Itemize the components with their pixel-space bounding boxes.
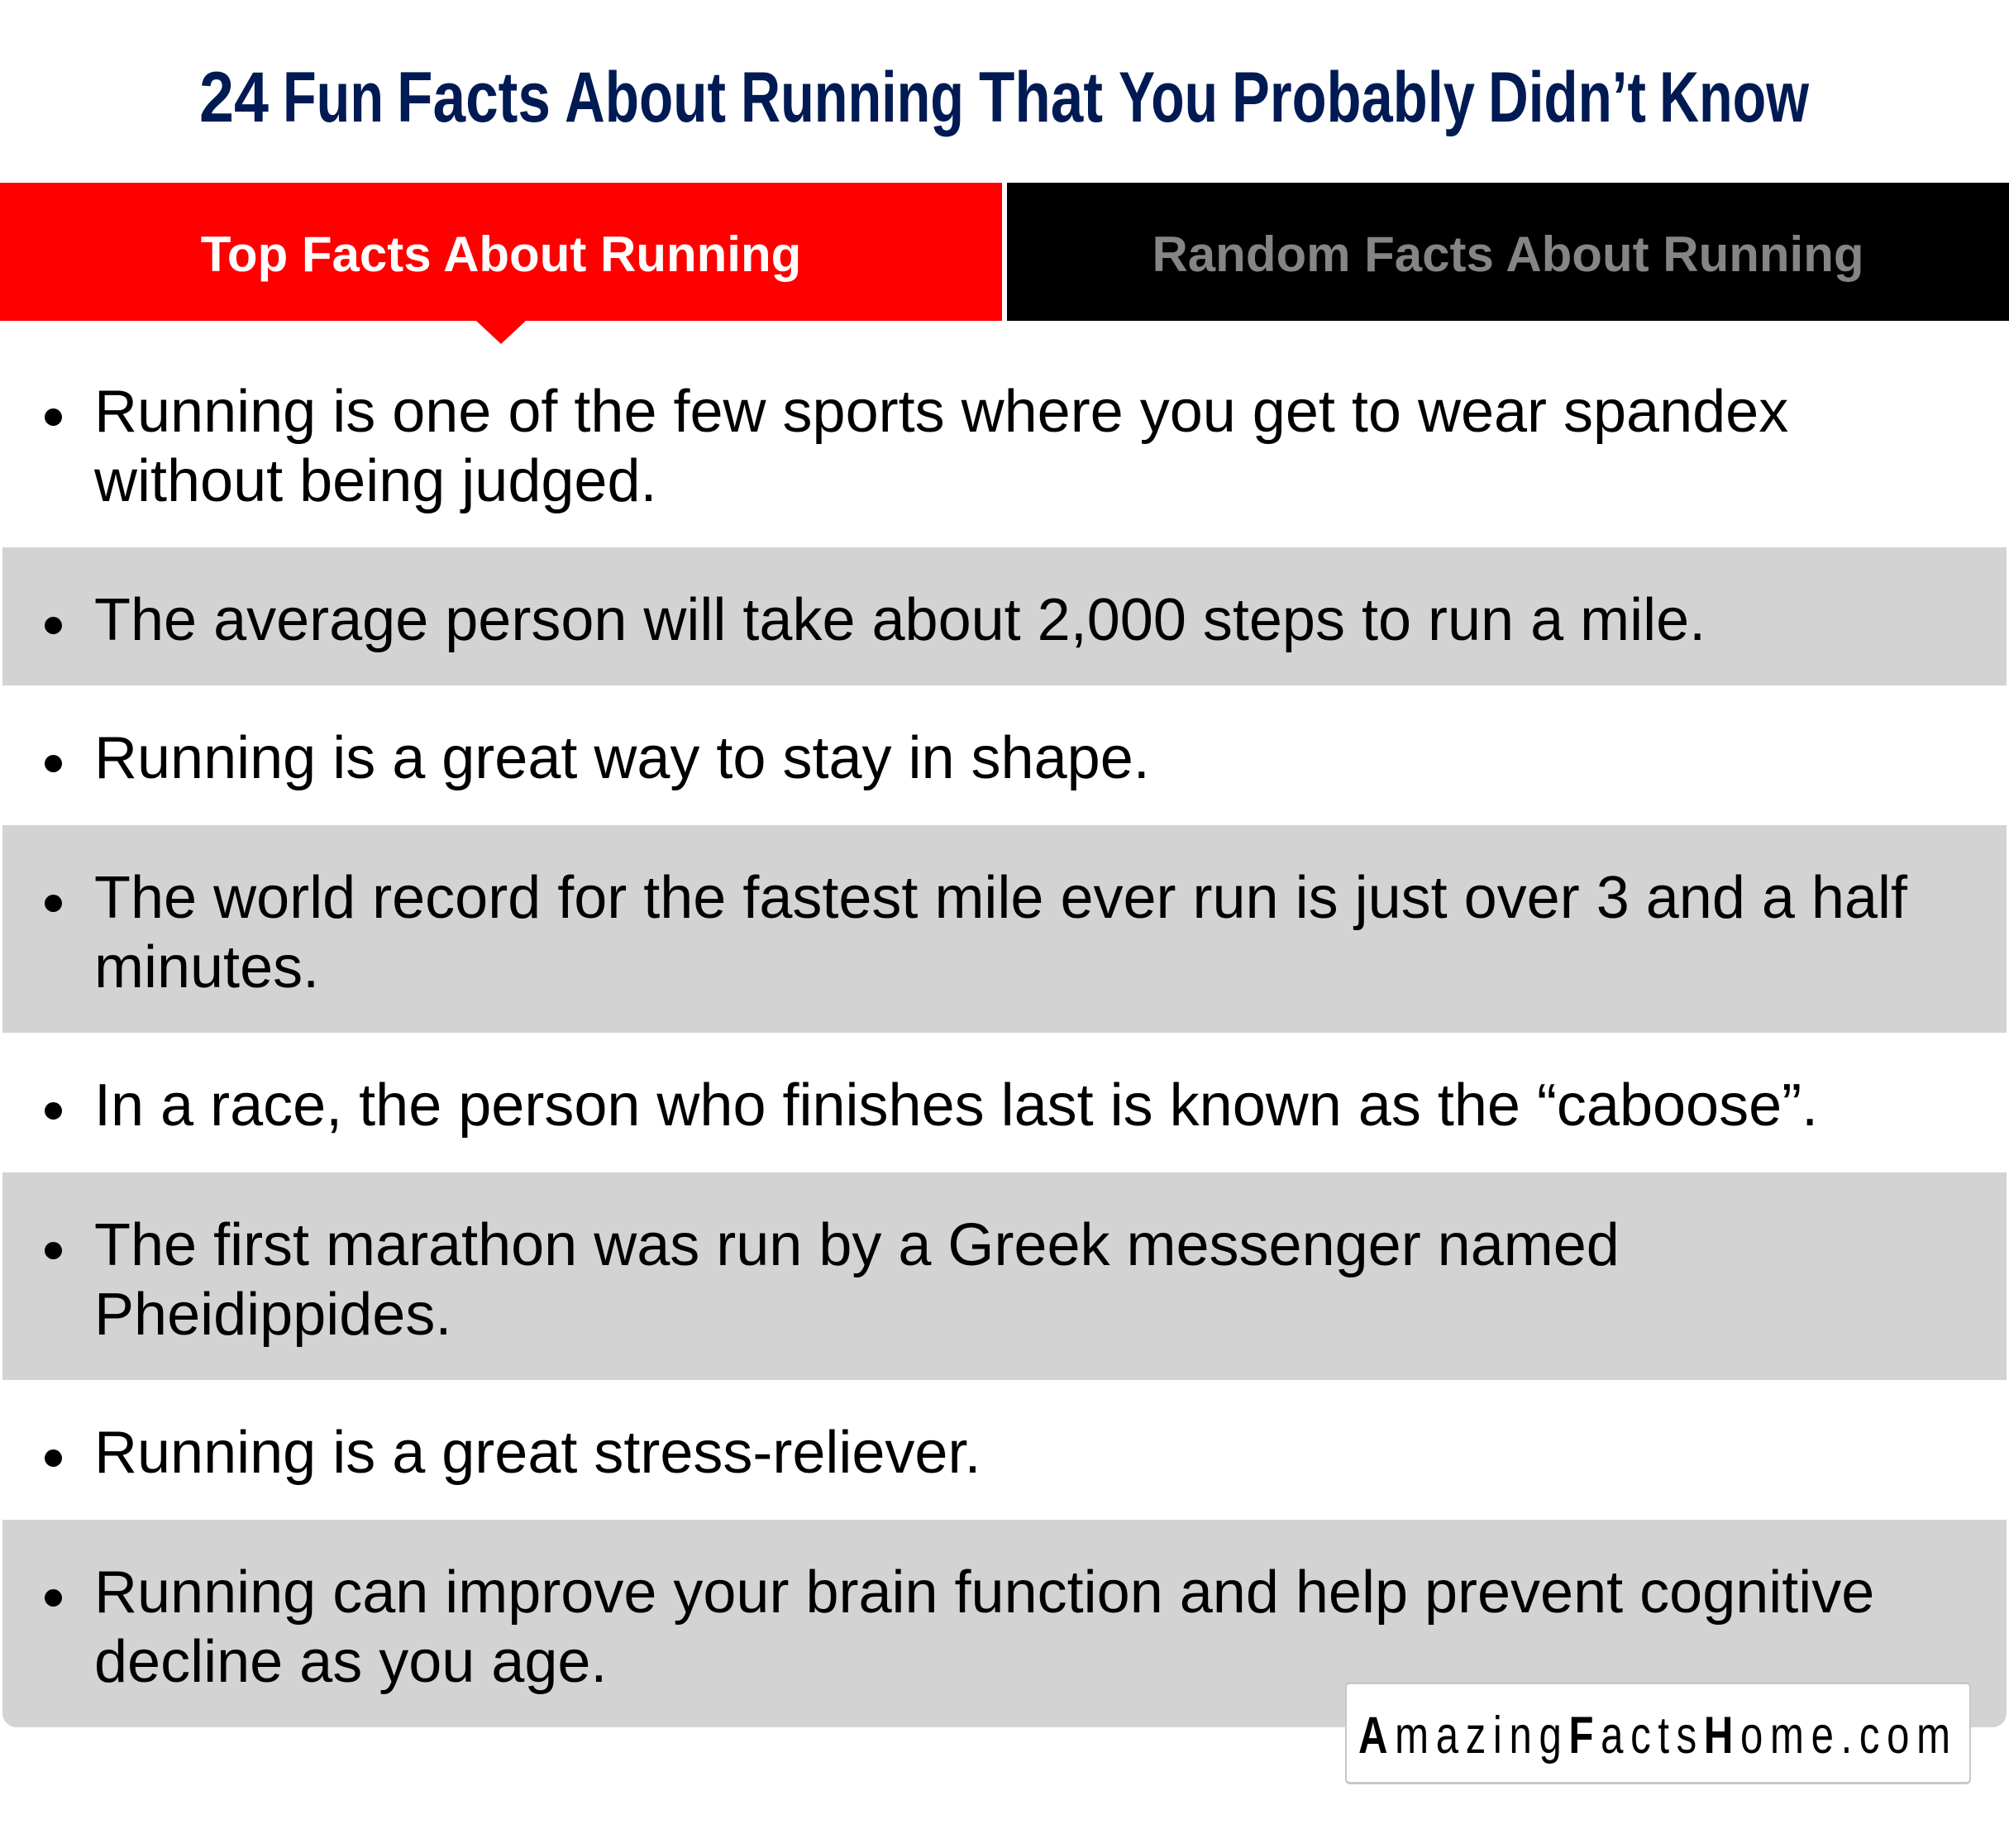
- fact 6: Pheidippides.: [94, 1282, 451, 1348]
- fact 1: Running is one of the few sports where you get to wear spandex: [94, 379, 1788, 445]
- fact 5: In a race, the person who finishes last is known as the “caboose”.: [94, 1072, 1818, 1139]
- fact 4: minutes.: [94, 934, 319, 1000]
- title: About: [565, 58, 726, 137]
- fact 2: The average person will take about 2,000 steps to run a mile.: [94, 587, 1706, 653]
- fact 1: [45, 379, 1788, 514]
- tab: random facts (inactive): Random Facts About Running: [1152, 227, 1864, 282]
- fact 8: decline as you age.: [94, 1629, 607, 1695]
- title: That: [979, 58, 1103, 137]
- title: Facts: [397, 58, 551, 137]
- logo badge: [1345, 1682, 1971, 1784]
- fact 8: Running can improve your brain function and help prevent cognitive: [94, 1559, 1874, 1626]
- fact 8: [2, 1520, 2007, 1727]
- logo text: AmazingFactsHome.com: AmazingFactsHome.com: [1358, 1706, 1950, 1764]
- fact 4: [2, 825, 2007, 1033]
- title: Fun: [283, 58, 384, 137]
- title: [199, 58, 1810, 137]
- fact 6: [2, 1172, 2007, 1380]
- fact 3: Running is a great way to stay in shape.: [94, 725, 1150, 791]
- tab: top facts (active): [0, 183, 1002, 321]
- tab: random facts (inactive): [1007, 183, 2009, 321]
- title: You: [1119, 58, 1218, 137]
- fact 2: [2, 547, 2007, 685]
- fact 4: The world record for the fastest mile ever run is just over 3 and a half: [94, 865, 1907, 931]
- fact 6: The first marathon was run by a Greek messenger named: [94, 1212, 1620, 1278]
- title: Didn’t: [1488, 58, 1646, 137]
- title: Running: [741, 58, 964, 137]
- fact 1: without being judged.: [94, 448, 657, 514]
- title: Probably: [1232, 58, 1475, 137]
- tab pointer arrow: [476, 321, 526, 344]
- title: 24: [199, 58, 269, 137]
- fact 7: Running is a great stress-reliever.: [94, 1420, 981, 1486]
- tab: top facts (active): Top Facts About Running: [201, 227, 801, 282]
- title: Know: [1659, 58, 1810, 137]
